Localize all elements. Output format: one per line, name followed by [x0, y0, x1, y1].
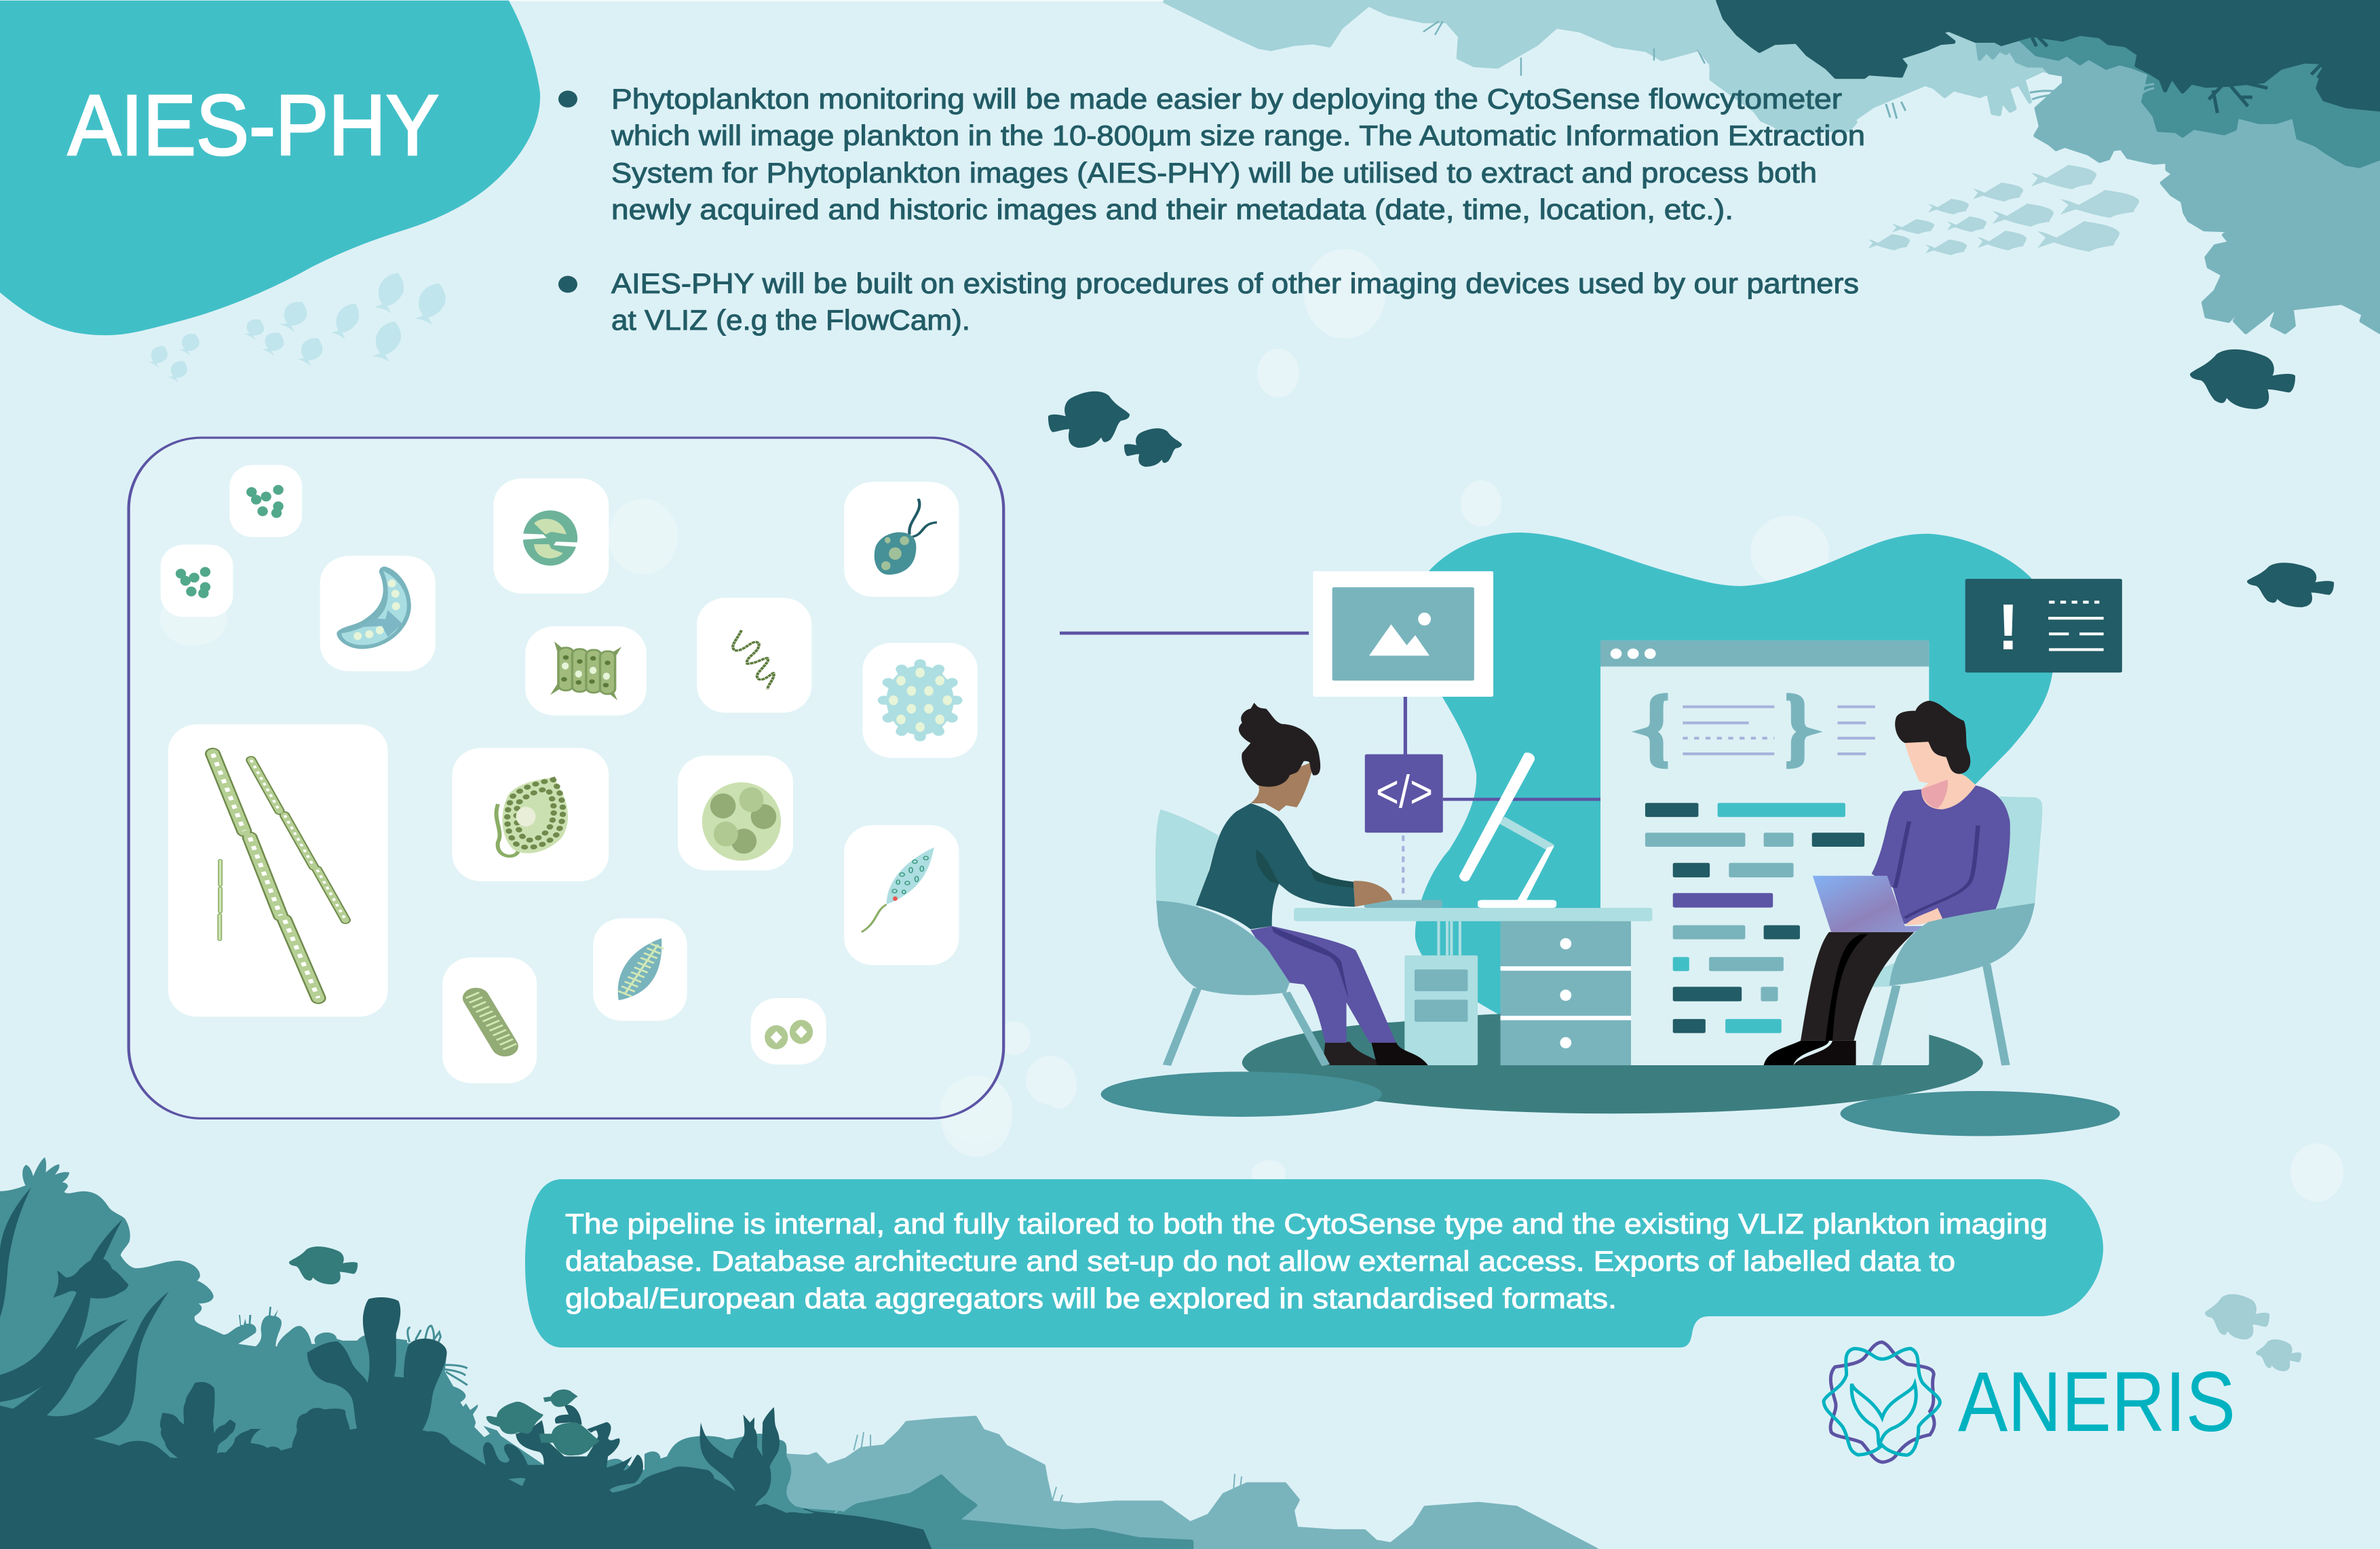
chair back — [1868, 797, 2042, 987]
ground pad left — [1101, 1072, 1382, 1117]
bullet 2 text — [611, 267, 1859, 336]
woman seated — [1155, 703, 1428, 1065]
code lines — [1683, 707, 1875, 754]
reef tufts right — [834, 1432, 1242, 1513]
connector lines — [1060, 633, 1600, 799]
bullet 1 text: which will image plankton in the 10-800µm size range. The Automatic Information Extraction — [611, 119, 1865, 151]
plankton: dot clusters — [176, 485, 284, 598]
callout text — [565, 1208, 2048, 1314]
code bars — [1645, 803, 1864, 1033]
bottom reef: light hills and right side — [759, 1418, 1596, 1549]
dashed connector — [1402, 835, 1404, 898]
bullet 1 text: newly acquired and historic images and their metadata (date, time, location, etc.). — [611, 193, 1733, 225]
plankton: ribbed pill — [472, 995, 511, 1048]
plankton: round colony — [702, 782, 781, 861]
coral: darkest layer — [1718, 0, 2380, 110]
code icon box — [1365, 754, 1443, 833]
chair back — [1155, 809, 1218, 910]
logo: ANERIS — [1824, 1342, 2235, 1462]
picture frame icon — [1313, 571, 1493, 697]
image cards — [161, 465, 978, 1083]
chair seat — [1889, 903, 2035, 986]
icon: code tag: </> — [1376, 766, 1433, 818]
torso — [1196, 803, 1355, 930]
top right coral silhouettes — [1696, 0, 2380, 332]
callout: pipeline — [525, 1179, 2103, 1347]
trousers — [1801, 932, 1914, 1041]
reef: right mid layer — [782, 1476, 1191, 1549]
reef: centre dark ground — [373, 1323, 814, 1549]
neck and face — [1905, 741, 1976, 809]
reef: light hills — [786, 1418, 1596, 1549]
reef: centre mid layer — [396, 1340, 814, 1549]
background blob — [1415, 533, 2052, 1018]
panel: plankton images — [129, 438, 1012, 1143]
bullet 1 text — [611, 83, 1865, 225]
logo emblem — [1824, 1342, 1940, 1462]
fish: bottom left — [289, 1246, 358, 1284]
coral: pale layer — [1696, 0, 2071, 130]
panel background — [129, 438, 1003, 1118]
reef: left mid layer — [0, 1158, 407, 1507]
fish school under title — [147, 269, 451, 384]
browser window — [1600, 640, 1929, 1065]
illustration: analyst scene — [1060, 533, 2122, 1136]
coral: pale reef left — [1165, 1, 1725, 66]
bullet 1 text: Phytoplankton monitoring will be made easier by deploying the CytoSense flowcytometer — [611, 83, 1842, 115]
callout text: database. Database architecture and set-up do not allow external access. Exports of labelled data to — [565, 1245, 1955, 1277]
shoes — [1323, 1042, 1384, 1065]
bottom reef: centre section — [373, 1323, 814, 1549]
fish: dark far right — [2247, 562, 2334, 607]
bullet 2 text: AIES-PHY will be built on existing procedures of other imaging devices used by our partners — [611, 267, 1859, 299]
reef: dark ground tail — [759, 1510, 929, 1549]
trousers — [1250, 926, 1396, 1043]
neck and hand — [1250, 761, 1314, 811]
reef tufts centre — [408, 1326, 467, 1385]
fish: pale pair lower right — [2205, 1294, 2301, 1371]
reef fish centre — [486, 1390, 600, 1455]
desk — [1294, 908, 1652, 1065]
plankton: star diatom — [883, 664, 957, 737]
reef: left dark ground and kelp — [0, 1219, 407, 1549]
tower cables — [1439, 921, 1460, 955]
hand — [1905, 908, 1942, 925]
man seated — [1764, 701, 2042, 1065]
plankton: spotted leaf cell — [497, 778, 568, 856]
hair — [1895, 701, 1970, 774]
computer tower — [1404, 955, 1478, 1065]
plankton: ribbed leaf — [618, 938, 661, 1000]
shoes — [1764, 1041, 1829, 1065]
coral: deep teal layer — [2017, 22, 2380, 166]
top coral silhouettes: left light section — [1165, 1, 1725, 76]
plankton: split round cell — [521, 510, 579, 566]
callout text: global/European data aggregators will be explored in standardised formats. — [565, 1282, 1617, 1314]
code braces — [1647, 697, 1807, 765]
intro text block — [558, 83, 1865, 336]
bullet 1 — [558, 91, 577, 107]
fish school top right — [1868, 165, 2139, 255]
callout text: The pipeline is internal, and fully tailored to both the CytoSense type and the existing VLIZ plankton imaging — [565, 1208, 2048, 1240]
kelp gap — [0, 1383, 45, 1409]
ground pad right — [1841, 1091, 2120, 1136]
background bubbles — [940, 249, 2343, 1202]
plankton: crescent — [337, 567, 411, 649]
kelp blade — [0, 1187, 31, 1318]
plankton: paired rings — [765, 1020, 813, 1050]
plankton: flagellate cell — [875, 499, 937, 575]
hair — [1239, 703, 1320, 787]
alert card — [1965, 579, 2122, 672]
ground shadow — [1242, 1013, 1983, 1113]
callout shape — [525, 1179, 2103, 1347]
laptop — [1813, 876, 1925, 932]
plankton: euglena leaf — [862, 847, 934, 932]
monitor and keyboard — [1364, 752, 1556, 908]
bullet 2 text: at VLIZ (e.g the FlowCam). — [611, 304, 970, 336]
coral: mid layer — [1978, 22, 2380, 332]
seaweed strands right — [1886, 37, 2324, 119]
plankton: squiggle chain — [733, 630, 774, 689]
seaweed strands left — [1423, 21, 1705, 76]
fish: dark pair upper centre — [1048, 391, 1182, 467]
logo wordmark: ANERIS — [1958, 1355, 2235, 1449]
sweater — [1872, 785, 2010, 924]
plankton: filament chains — [213, 754, 345, 998]
bottom reef: left section — [0, 1158, 407, 1549]
panel frame — [129, 438, 1003, 1118]
plankton: diatom block — [550, 641, 621, 700]
icon: exclamation mark: ! — [1997, 591, 2019, 664]
chair seat — [1156, 901, 1290, 995]
fish: dark right — [2190, 349, 2295, 409]
bullet 1 text: System for Phytoplankton images (AIES-PHY) will be utilised to extract and process both — [611, 157, 1817, 189]
drawers — [1501, 921, 1631, 1065]
bullet 2 — [558, 275, 577, 293]
title: AIES-PHY — [68, 77, 439, 173]
title blob — [0, 1, 540, 335]
browser title bar — [1600, 640, 1929, 666]
